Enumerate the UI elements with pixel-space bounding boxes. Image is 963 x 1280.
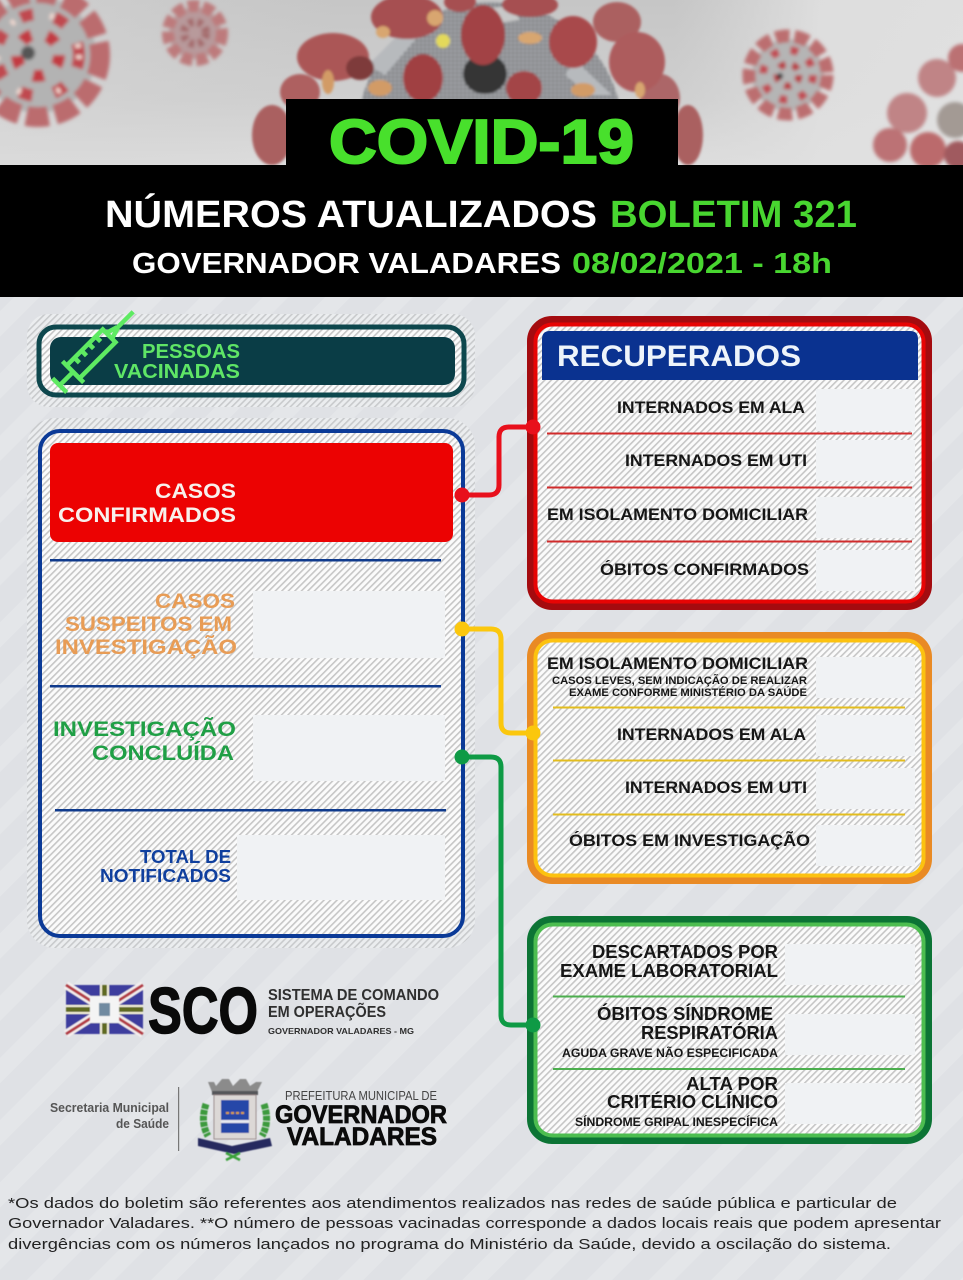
logo text: sistema de comando em operações	[268, 987, 439, 1036]
label: casos suspeitos em investigação: SUSPEITOS EM	[65, 613, 232, 636]
icon: syringe	[49, 301, 144, 396]
label: casos suspeitos em investigação: CASOS	[155, 590, 235, 613]
text: secretaria municipal de saúde: de Saúde	[116, 1117, 169, 1131]
recuperados header: RECUPERADOS	[557, 340, 801, 373]
arrow: suspeitos to detalhes	[454, 622, 540, 740]
suspeitos labels: EM ISOLAMENTO DOMICILIAR	[547, 654, 808, 673]
value box: casos suspeitos	[253, 591, 445, 658]
descartados e óbitos labels: DESCARTADOS POR	[592, 942, 778, 962]
text: secretaria municipal de saúde	[50, 1101, 169, 1131]
descartados e óbitos labels: SÍNDROME GRIPAL INESPECÍFICA	[575, 1114, 778, 1129]
recuperados labels: INTERNADOS EM ALA	[617, 398, 805, 417]
descartados e óbitos labels: CRITÉRIO CLÍNICO	[607, 1091, 778, 1112]
logo text: prefeitura de governador valadares: PREFEITURA MUNICIPAL DE	[285, 1089, 437, 1103]
label: total de notificados	[100, 847, 231, 886]
descartados e óbitos labels: RESPIRATÓRIA	[641, 1022, 778, 1043]
panel: suspeitos	[532, 637, 927, 879]
casos confirmados card: CASOS	[155, 480, 236, 503]
logo: flag	[66, 985, 143, 1034]
recuperados labels: ÓBITOS CONFIRMADOS	[600, 560, 809, 579]
footnote text	[8, 1195, 941, 1253]
suspeitos labels: EXAME CONFORME MINISTÉRIO DA SAÚDE	[569, 686, 807, 699]
descartados e óbitos labels: EXAME LABORATORIAL	[560, 961, 778, 981]
suspeitos labels: CASOS LEVES, SEM INDICAÇÃO DE REALIZAR	[552, 674, 807, 687]
footnote text: divergências com os números lançados no programa do Ministério da Saúde, devido a oscilação do sistema.	[8, 1236, 891, 1253]
logo text: sistema de comando em operações: SISTEMA DE COMANDO	[268, 987, 439, 1004]
label: casos suspeitos em investigação	[55, 590, 237, 659]
recuperados labels	[547, 398, 809, 579]
descartados e óbitos labels	[560, 942, 778, 1129]
recuperados header	[542, 331, 918, 380]
footnote text: *Os dados do boletim são referentes aos atendimentos realizados nas redes de saúde pública e particular de	[8, 1195, 897, 1212]
heading: governador valadares date: 08/02/2021 - 18h	[572, 248, 832, 280]
label: pessoas vacinadas	[114, 341, 240, 383]
label: total de notificados: TOTAL DE	[140, 847, 231, 867]
logo text: sistema de comando em operações: GOVERNADOR VALADARES - MG	[268, 1026, 414, 1036]
label: investigação concluída: INVESTIGAÇÃO	[53, 718, 236, 741]
label: total de notificados: NOTIFICADOS	[100, 866, 231, 886]
heading: governador valadares date: GOVERNADOR VALADARES	[132, 248, 561, 280]
heading: números atualizados boletim 321: BOLETIM 321	[610, 194, 857, 236]
suspeitos labels	[547, 654, 810, 850]
label: investigação concluída: CONCLUÍDA	[92, 742, 234, 765]
suspeitos labels: INTERNADOS EM ALA	[617, 725, 806, 744]
logo text: sistema de comando em operações: EM OPERAÇÕES	[268, 1001, 386, 1021]
suspeitos labels: INTERNADOS EM UTI	[625, 778, 807, 797]
label: investigação concluída	[53, 718, 236, 765]
recuperados labels: INTERNADOS EM UTI	[625, 451, 807, 470]
descartados e óbitos labels: AGUDA GRAVE NÃO ESPECIFICADA	[562, 1045, 778, 1060]
heading: governador valadares date	[132, 248, 832, 280]
header black band with title tab	[0, 99, 963, 297]
heading: números atualizados boletim 321: NÚMEROS ATUALIZADOS	[105, 192, 597, 236]
value box: total de notificados	[237, 835, 445, 900]
suspeitos labels: ÓBITOS EM INVESTIGAÇÃO	[569, 830, 810, 850]
logo: SCO: SCO	[148, 974, 258, 1047]
label: casos suspeitos em investigação: INVESTIGAÇÃO	[55, 636, 237, 659]
logo: city coat of arms	[198, 1079, 272, 1160]
arrow: concluída to detalhes	[454, 750, 540, 1032]
descartados e óbitos labels: ALTA POR	[686, 1074, 778, 1094]
heading: números atualizados boletim 321	[105, 192, 857, 236]
footnote text: Governador Valadares. **O número de pessoas vacinadas corresponde a dados locais reais que podem apresentar	[8, 1215, 941, 1232]
header photo: coronavirus particles	[0, 0, 963, 165]
recuperados labels: EM ISOLAMENTO DOMICILIAR	[547, 505, 808, 524]
casos confirmados card: CONFIRMADOS	[58, 504, 236, 527]
page background	[0, 297, 963, 1280]
title: COVID-19: COVID-19	[329, 108, 634, 177]
panel: pessoas vacinadas	[27, 301, 475, 407]
arrow: confirmados to recuperados	[454, 420, 540, 502]
descartados e óbitos labels: ÓBITOS SÍNDROME	[597, 1003, 773, 1024]
value box: investigação concluída	[253, 715, 445, 781]
label: pessoas vacinadas: VACINADAS	[114, 361, 240, 383]
text: secretaria municipal de saúde: Secretaria Municipal	[50, 1101, 169, 1115]
logo text: prefeitura de governador valadares: VALADARES	[287, 1123, 437, 1151]
label: pessoas vacinadas: PESSOAS	[142, 341, 240, 363]
panel: investigação concluída detalhes	[532, 921, 927, 1139]
logo text: prefeitura de governador valadares	[275, 1089, 447, 1151]
panel: recuperados	[532, 321, 927, 605]
logo text: prefeitura de governador valadares: GOVERNADOR	[275, 1101, 447, 1129]
panel: casos	[27, 418, 475, 948]
casos confirmados card	[50, 443, 453, 542]
